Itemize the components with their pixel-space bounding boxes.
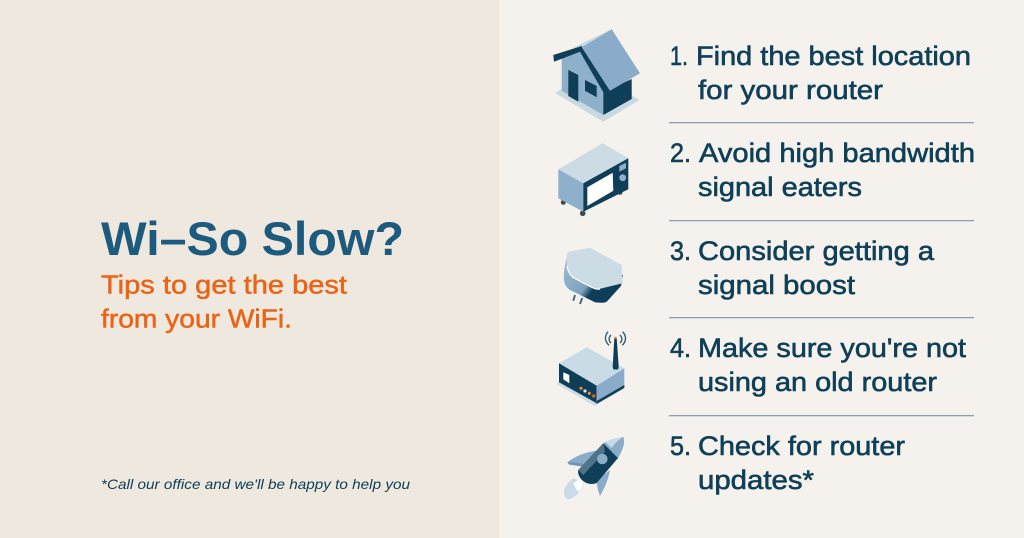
title: Wi–So Slow? bbox=[101, 212, 404, 265]
icon: signal booster bbox=[564, 248, 623, 304]
subtitle: from your WiFi. bbox=[101, 304, 292, 334]
step 1 text: for your router bbox=[698, 75, 883, 105]
panel: right background bbox=[499, 0, 1024, 538]
step 2 text: Avoid high bandwidth bbox=[699, 138, 975, 168]
step 3 text: 3. bbox=[670, 236, 691, 266]
step 2 text bbox=[670, 138, 975, 202]
step 4 text: Make sure you're not bbox=[698, 333, 967, 363]
step 5 text bbox=[670, 431, 905, 495]
step 3 text: signal boost bbox=[698, 270, 856, 300]
divider bbox=[669, 317, 974, 318]
subtitle: Tips to get the best bbox=[101, 270, 348, 300]
footnote: *Call our office and we'll be happy to help you bbox=[101, 476, 410, 492]
subtitle bbox=[101, 270, 348, 334]
step 2 text: signal eaters bbox=[698, 172, 862, 202]
step 1 text bbox=[670, 41, 971, 105]
icon: router bbox=[557, 332, 626, 406]
step 5 text: updates* bbox=[698, 465, 815, 495]
step 3 text bbox=[670, 236, 935, 300]
step 2 text: 2. bbox=[670, 138, 691, 168]
icon: rocket bbox=[564, 437, 624, 499]
divider bbox=[669, 122, 974, 123]
icon: house bbox=[553, 29, 640, 122]
step 3 text: Consider getting a bbox=[698, 236, 935, 266]
panel: left background bbox=[0, 0, 499, 538]
step 4 text bbox=[670, 333, 967, 397]
step 5 text: 5. bbox=[670, 431, 691, 461]
step 4 text: 4. bbox=[670, 333, 691, 363]
divider bbox=[669, 415, 974, 416]
icon: microwave bbox=[558, 143, 628, 216]
step 5 text: Check for router bbox=[698, 431, 905, 461]
step 1 text: 1. bbox=[670, 41, 688, 71]
step 1 text: Find the best location bbox=[696, 41, 971, 71]
divider bbox=[669, 220, 974, 221]
step 4 text: using an old router bbox=[698, 367, 937, 397]
